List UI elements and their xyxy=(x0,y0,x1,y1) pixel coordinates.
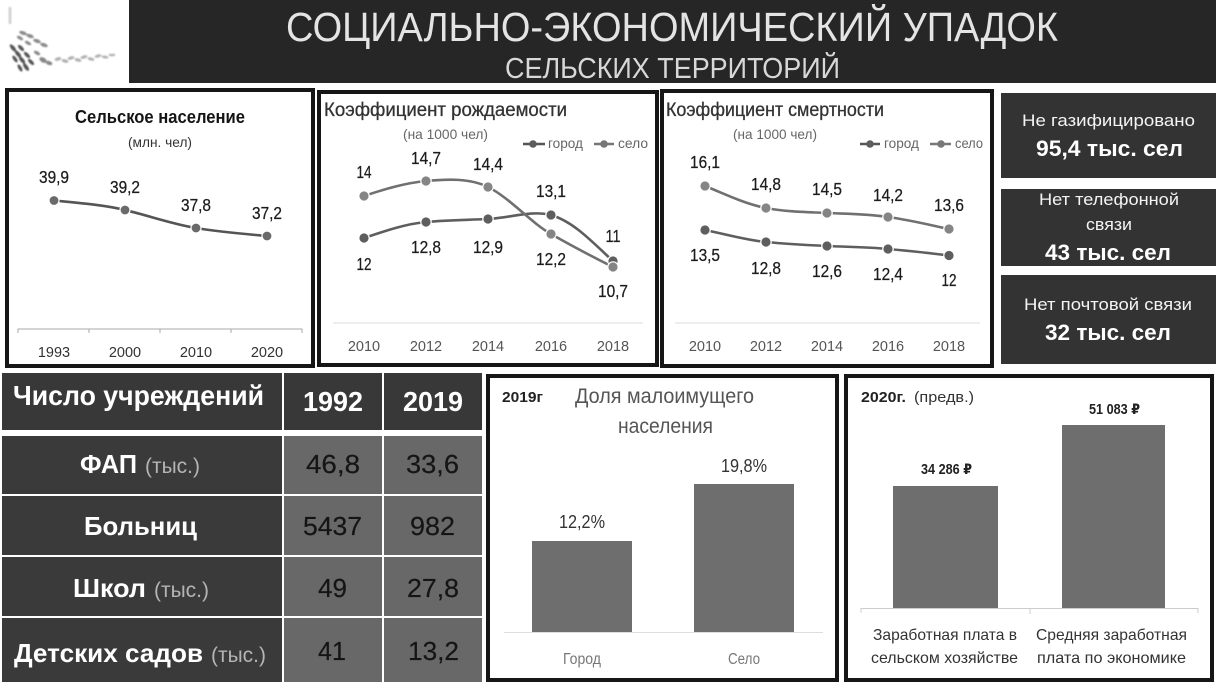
row: hospitals: Больниц xyxy=(84,511,197,541)
line chart: death rate: 2012 xyxy=(750,339,782,355)
line chart: population: 37,8 xyxy=(181,195,211,215)
line chart: population: 1993 xyxy=(38,345,70,361)
row: FAP: 33,6 xyxy=(406,449,459,479)
line chart: death rate: 12,6 xyxy=(812,261,842,281)
row: FAP xyxy=(2,436,482,494)
callout: no gas xyxy=(1001,93,1216,178)
panel: rural population xyxy=(7,90,313,366)
line chart: birth rate: 12,2 xyxy=(536,249,566,269)
heading: Доля малоимущего xyxy=(575,385,754,408)
line chart: birth rate: 12 xyxy=(356,254,372,274)
row: kindergartens: (тыс.) xyxy=(211,644,266,667)
row: FAP: ФАП xyxy=(80,449,137,479)
line chart: population: 2010 xyxy=(180,345,212,361)
line chart: birth rate: 14,4 xyxy=(473,154,503,174)
legend: город xyxy=(548,135,583,151)
line chart: birth rate: 11 xyxy=(606,226,620,246)
legend xyxy=(523,135,648,151)
callout: no post: Нет почтовой связи xyxy=(1024,296,1192,314)
bar chart: wages: Заработная плата в xyxy=(873,627,1017,644)
bar chart: low-income share xyxy=(504,456,823,668)
panel: birth rate xyxy=(319,92,657,365)
line chart: death rate: 2010 xyxy=(689,339,721,355)
heading: Коэффициент рождаемости xyxy=(324,100,567,121)
row: hospitals: 5437 xyxy=(303,511,362,541)
panel: death rate xyxy=(662,91,992,366)
heading xyxy=(575,385,754,438)
line chart: birth rate: 2010 xyxy=(348,339,380,355)
callout: no post: 32 тыс. сел xyxy=(1045,320,1171,345)
bar chart: low-income share: Село xyxy=(728,651,760,668)
row: kindergartens: Детских садов xyxy=(14,638,203,668)
line chart: population: 39,9 xyxy=(39,167,69,187)
row: schools xyxy=(2,557,482,616)
bar chart: low-income share: Город xyxy=(563,651,601,668)
line chart: death rate: 2018 xyxy=(933,339,965,355)
line chart: death rate: 16,1 xyxy=(690,152,720,172)
row: FAP: (тыс.) xyxy=(145,455,200,478)
title: СОЦИАЛЬНО-ЭКОНОМИЧЕСКИЙ УПАДОК xyxy=(286,4,1058,50)
line chart: birth rate: 12,8 xyxy=(411,237,441,257)
callout: no post xyxy=(1001,275,1216,364)
line chart: death rate: 12,8 xyxy=(751,258,781,278)
icon: wheat ear logo xyxy=(9,7,116,72)
line chart: population: 39,2 xyxy=(110,177,140,197)
panel: low-income population xyxy=(488,376,837,680)
table header xyxy=(2,373,482,430)
line chart: birth rate: 2018 xyxy=(597,339,629,355)
bar chart: wages: 51 083 ₽ xyxy=(1089,402,1140,418)
callout: no telephone: 43 тыс. сел xyxy=(1045,240,1171,265)
line chart: birth rate: 2012 xyxy=(410,339,442,355)
header banner xyxy=(129,0,1216,85)
row: kindergartens: 13,2 xyxy=(408,636,459,666)
year label xyxy=(861,389,974,406)
bar chart: wages: сельском хозяйстве xyxy=(871,650,1018,667)
row: schools: 27,8 xyxy=(407,573,459,603)
table header: 1992 xyxy=(303,386,363,417)
line chart: death rate: 13,5 xyxy=(690,245,720,265)
row: hospitals xyxy=(2,496,482,555)
line chart: birth rate: 2014 xyxy=(472,339,504,355)
panel: wages xyxy=(846,376,1212,680)
line chart: death rate: 14,5 xyxy=(812,179,842,199)
table header: Число учреждений xyxy=(13,380,264,411)
bar chart: wages xyxy=(861,402,1198,667)
callout: no gas: 95,4 тыс. сел xyxy=(1036,136,1183,161)
year label: 2020г. xyxy=(861,389,906,406)
row: schools: 49 xyxy=(318,573,347,603)
subtitle: СЕЛЬСКИХ ТЕРРИТОРИЙ xyxy=(505,51,840,85)
line chart: birth rate: 14 xyxy=(356,162,372,182)
line chart: birth rate: 13,1 xyxy=(536,181,566,201)
heading: Коэффициент смертности xyxy=(666,100,884,121)
row: schools: Школ xyxy=(73,573,146,603)
callout: no telephone xyxy=(1001,189,1216,266)
bar chart: wages: Средняя заработная xyxy=(1036,627,1187,644)
bar chart: low-income share: 12,2% xyxy=(559,512,605,532)
line chart: population: 37,2 xyxy=(252,203,282,223)
units: (млн. чел) xyxy=(128,134,192,150)
line chart: death rate: 2016 xyxy=(872,339,904,355)
legend: город xyxy=(884,135,919,151)
units: (на 1000 чел) xyxy=(403,126,488,142)
line chart: death rate xyxy=(675,152,980,355)
row: kindergartens xyxy=(2,618,482,682)
line chart: birth rate: 10,7 xyxy=(598,281,628,301)
bar chart: low-income share: 19,8% xyxy=(721,456,767,476)
line chart: population: 2000 xyxy=(109,345,141,361)
line chart: death rate: 14,2 xyxy=(873,185,903,205)
line chart: death rate: 12,4 xyxy=(873,264,903,284)
callout: no gas: Не газифицировано xyxy=(1022,112,1195,130)
line chart: death rate: 14,8 xyxy=(751,174,781,194)
callout: no telephone: Нет телефонной xyxy=(1039,191,1179,209)
legend: село xyxy=(955,135,983,151)
table header: 2019 xyxy=(403,386,463,417)
line chart: death rate: 12 xyxy=(942,270,956,290)
line chart: birth rate: 2016 xyxy=(535,339,567,355)
table: institutions xyxy=(2,373,482,682)
callout: no telephone: связи xyxy=(1086,216,1132,234)
line chart: population xyxy=(18,167,302,361)
row: kindergartens: 41 xyxy=(318,636,346,666)
heading: населения xyxy=(618,415,713,438)
year label: (предв.) xyxy=(914,389,974,406)
line chart: birth rate: 12,9 xyxy=(473,237,503,257)
bar chart: wages: 34 286 ₽ xyxy=(921,462,972,478)
line chart: population: 2020 xyxy=(251,345,283,361)
year label: 2019г xyxy=(502,389,543,406)
line chart: birth rate xyxy=(333,148,643,355)
row: FAP: 46,8 xyxy=(306,449,360,479)
legend xyxy=(860,135,983,151)
legend: село xyxy=(618,135,648,151)
bar chart: wages: плата по экономике xyxy=(1037,650,1186,667)
heading: Сельское население xyxy=(75,106,245,127)
row: hospitals: 982 xyxy=(410,511,455,541)
line chart: death rate: 2014 xyxy=(811,339,843,355)
row: schools: (тыс.) xyxy=(154,579,209,602)
line chart: death rate: 13,6 xyxy=(934,195,964,215)
line chart: birth rate: 14,7 xyxy=(411,148,441,168)
units: (на 1000 чел) xyxy=(733,126,817,142)
